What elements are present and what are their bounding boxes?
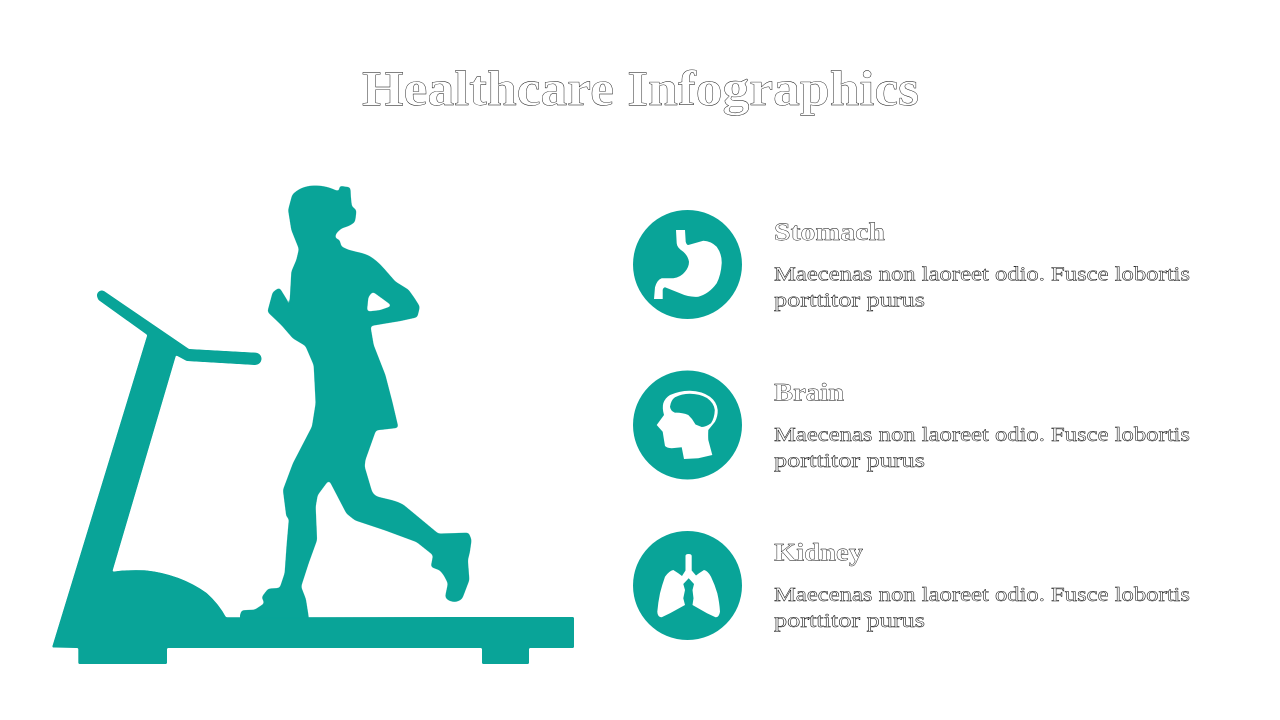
text: brain description (774, 424, 1190, 472)
item: brain (633, 370, 1190, 480)
heading: kidney: Kidney (774, 540, 864, 566)
text: stomach description: porttitor purus (774, 290, 925, 312)
treadmill (52, 291, 574, 664)
heading: stomach: Stomach (774, 219, 885, 246)
item: stomach (633, 210, 1190, 319)
icon: stomach (633, 210, 742, 319)
text: brain description: porttitor purus (774, 450, 925, 472)
text: kidney description (774, 584, 1190, 632)
runner (240, 186, 471, 620)
heading: brain: Brain (774, 380, 844, 406)
text: kidney description: Maecenas non laoreet odio. Fusce lobortis (774, 584, 1190, 606)
item: kidney (633, 531, 1190, 640)
text: stomach description: Maecenas non laoreet odio. Fusce lobortis (774, 264, 1190, 286)
icon: lungs (633, 531, 742, 640)
icon: head with brain (633, 370, 742, 480)
text: brain description: Maecenas non laoreet odio. Fusce lobortis (774, 424, 1190, 446)
illustration: runner on treadmill (52, 186, 574, 664)
title: Healthcare Infographics (362, 60, 919, 116)
text: stomach description (774, 264, 1190, 312)
text: kidney description: porttitor purus (774, 610, 925, 632)
